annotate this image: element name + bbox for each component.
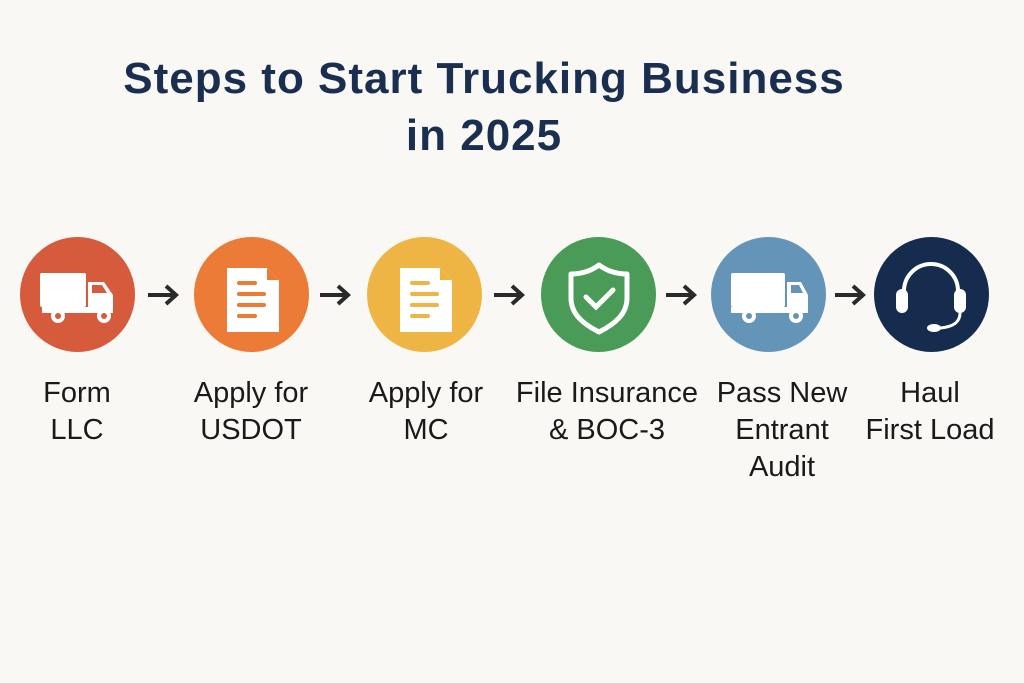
title: Steps to Start Trucking Business [123, 54, 845, 103]
step 2 [194, 237, 309, 446]
label: File Insurance [516, 377, 698, 409]
label: Pass New [717, 377, 847, 409]
label: MC [403, 414, 449, 446]
icon: shield green [541, 237, 656, 352]
step 1: form llc [20, 237, 135, 446]
label [43, 377, 111, 446]
label [516, 377, 698, 446]
label: USDOT [200, 414, 302, 446]
label: Apply for [369, 377, 483, 409]
label: LLC [50, 414, 104, 446]
step 5 [711, 237, 848, 483]
arrow [835, 284, 866, 306]
label: Haul [900, 377, 960, 409]
label: First Load [866, 414, 994, 446]
title: in 2025 [406, 111, 562, 160]
title [123, 54, 845, 160]
arrow [666, 284, 697, 306]
step 3 [367, 237, 483, 446]
label: Apply for [194, 377, 308, 409]
label: & BOC-3 [549, 414, 665, 446]
arrow [148, 284, 179, 306]
icon: document yellow [367, 237, 482, 352]
icon: truck red [20, 237, 135, 352]
label: Audit [749, 451, 815, 483]
step 6 [866, 237, 994, 446]
label [717, 377, 848, 483]
label [368, 377, 483, 446]
icon: truck blue [711, 237, 826, 352]
step 4 [516, 237, 698, 446]
icon: headset navy [874, 237, 989, 352]
label [194, 377, 308, 446]
label: Form [43, 377, 111, 409]
arrow [320, 284, 351, 306]
arrow [494, 284, 525, 306]
label [866, 377, 994, 446]
icon: document orange [194, 237, 309, 352]
label: Entrant [735, 414, 829, 446]
